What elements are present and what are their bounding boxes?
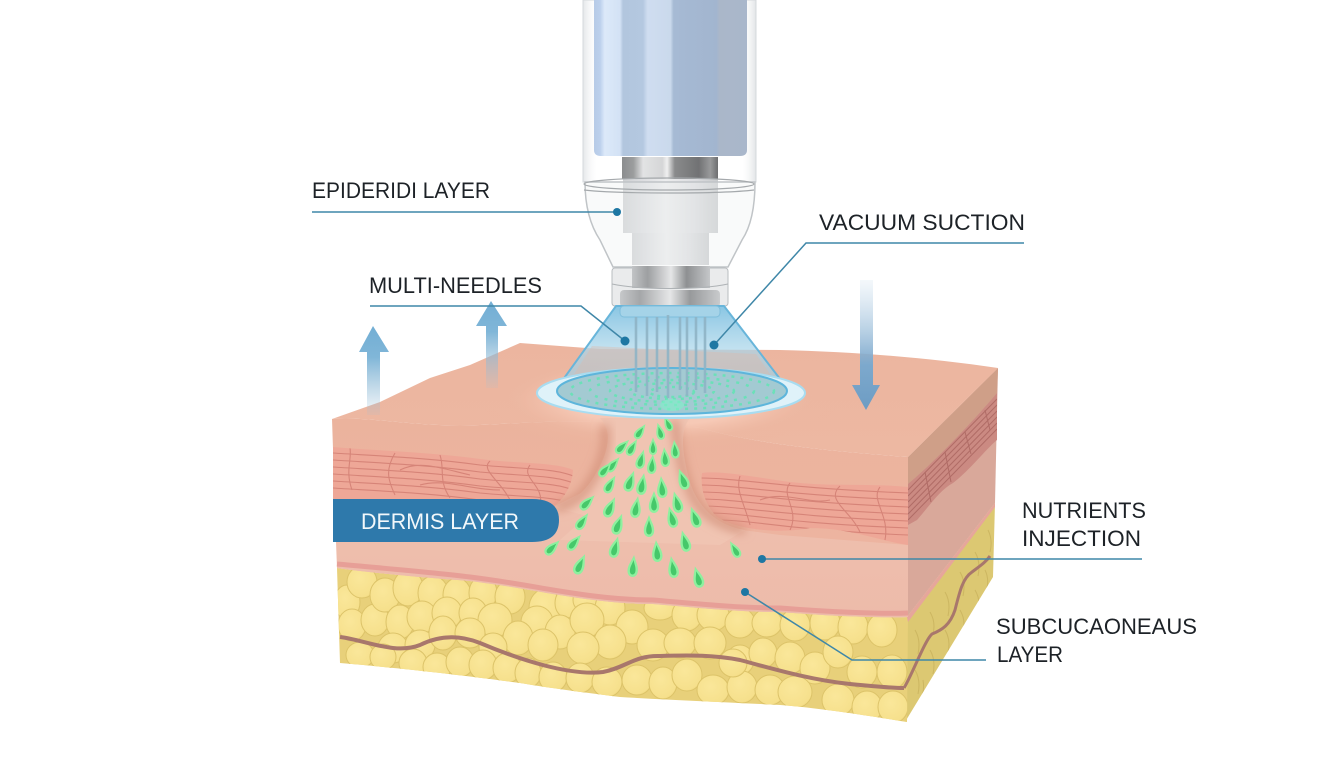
suction dimple around flange	[480, 350, 840, 450]
label: nutrients injection: NUTRIENTS	[1022, 498, 1146, 523]
label: epiderm	[312, 178, 621, 216]
striated layer left	[333, 447, 573, 507]
canyon wall shadow right	[674, 420, 745, 530]
arrow: upward middle	[476, 301, 507, 388]
clear connector	[612, 266, 728, 307]
outer glass barrel	[583, 0, 756, 182]
skin right side face	[907, 368, 998, 617]
label: subcutaneous layer	[741, 588, 1197, 667]
blood vessel front	[340, 637, 904, 688]
striated layer on side	[908, 393, 997, 525]
skin top surface	[332, 343, 998, 457]
label: vacuum suction	[710, 210, 1025, 350]
fat layer side face	[905, 503, 995, 722]
needle hub	[620, 306, 720, 317]
blood vessel side	[904, 556, 990, 688]
fat layer front face	[334, 566, 908, 723]
label: nutrients injection	[758, 498, 1146, 563]
flange disc	[537, 368, 805, 418]
needles	[636, 315, 705, 398]
arrow: upward left	[359, 326, 389, 415]
glass ring band	[584, 178, 754, 193]
canyon wall shadow left	[555, 425, 606, 508]
label: dermis layer	[333, 499, 559, 542]
contact plate with green spots	[557, 368, 787, 414]
metal collar	[622, 157, 718, 179]
label: epiderm: EPIDERIDI LAYER	[312, 178, 490, 203]
label: multi-needles: MULTI-NEEDLES	[369, 273, 542, 298]
blue cylinder	[594, 0, 747, 156]
dermis layer	[337, 417, 908, 617]
label: dermis layer: DERMIS LAYER	[361, 509, 519, 534]
label: subcutaneous layer: SUBCUCAONEAUS	[996, 614, 1197, 639]
vacuum cone	[557, 306, 787, 403]
label: multi-needles	[369, 273, 630, 346]
label: nutrients injection: INJECTION	[1022, 526, 1141, 551]
glass shoulder	[585, 182, 755, 267]
green nutrient droplets	[542, 414, 743, 589]
label: vacuum suction: VACUUM SUCTION	[819, 210, 1025, 235]
arrow: downward suction	[852, 280, 880, 410]
inner narrow shaft	[632, 233, 709, 265]
skin seen through cone	[565, 346, 780, 398]
dermis lower edge	[337, 564, 908, 613]
striated layer right	[700, 472, 908, 545]
central funnel canyon	[553, 418, 745, 545]
skin and fat tissue block	[332, 343, 998, 723]
inner grey block	[623, 179, 718, 233]
injector device	[537, 0, 805, 418]
label: subcutaneous layer: LAYER	[997, 642, 1063, 667]
skin front face	[332, 419, 908, 617]
